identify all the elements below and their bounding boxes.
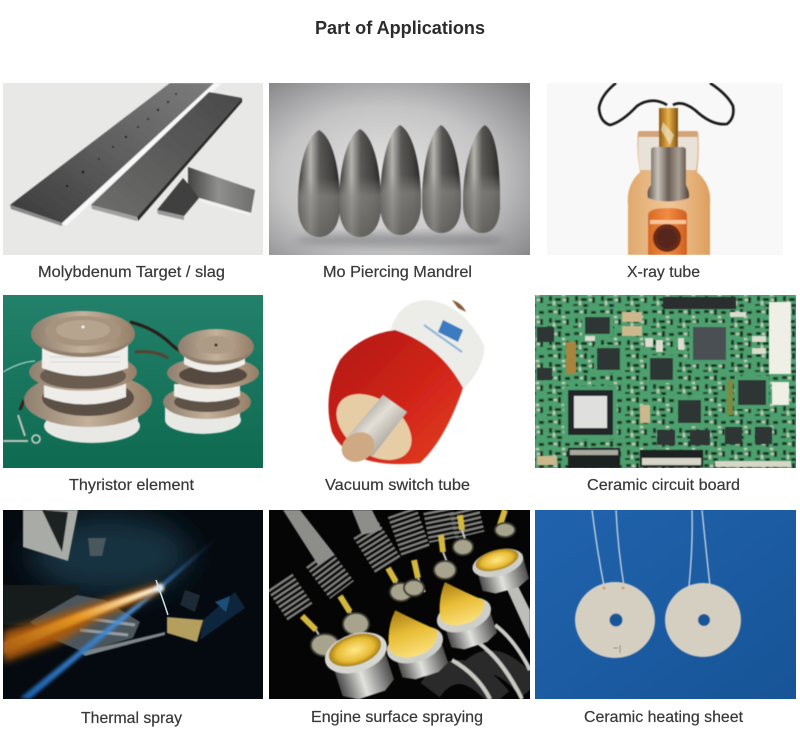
- panel: ceramic circuit board: [530, 290, 800, 494]
- photo: red and white vacuum tube: [324, 300, 484, 474]
- piston 2: [375, 599, 453, 685]
- caption: Vacuum switch tube: [325, 477, 470, 494]
- panel: molybdenum target: [3, 83, 263, 281]
- caption: Engine surface spraying: [311, 709, 483, 726]
- panel: mo piercing mandrel: [269, 83, 530, 281]
- photo: thermal spray torch: [3, 510, 263, 699]
- title: Part of Applications: [315, 18, 485, 38]
- photo: x-ray tube: [596, 83, 736, 255]
- photo: five bullet mandrels: [269, 83, 530, 255]
- caption: X-ray tube: [627, 264, 700, 281]
- caption: Molybdenum Target / slag: [38, 264, 225, 281]
- panel: thermal spray: [3, 510, 263, 727]
- caption: Thermal spray: [81, 710, 182, 727]
- caption: Ceramic heating sheet: [584, 709, 744, 726]
- panel: x-ray tube: [547, 83, 783, 281]
- photo: engine pistons and springs: [269, 510, 530, 699]
- panel: thyristor element: [3, 295, 263, 494]
- panel: vacuum switch tube: [324, 300, 484, 494]
- caption: Thyristor element: [69, 477, 195, 494]
- panel: engine surface spraying: [269, 510, 530, 726]
- panel: ceramic heating sheet: [535, 510, 796, 726]
- photo: circuit board with chips: [535, 295, 796, 468]
- caption: Mo Piercing Mandrel: [323, 264, 472, 281]
- piston 3: [426, 571, 501, 655]
- photo: thyristor stacks on green mat: [3, 295, 263, 468]
- piston 1: [320, 625, 400, 706]
- caption: Ceramic circuit board: [587, 477, 740, 494]
- piston 4: [469, 544, 530, 598]
- photo: molybdenum plates: [3, 83, 263, 255]
- photo: ceramic heating discs on blue: [535, 510, 796, 699]
